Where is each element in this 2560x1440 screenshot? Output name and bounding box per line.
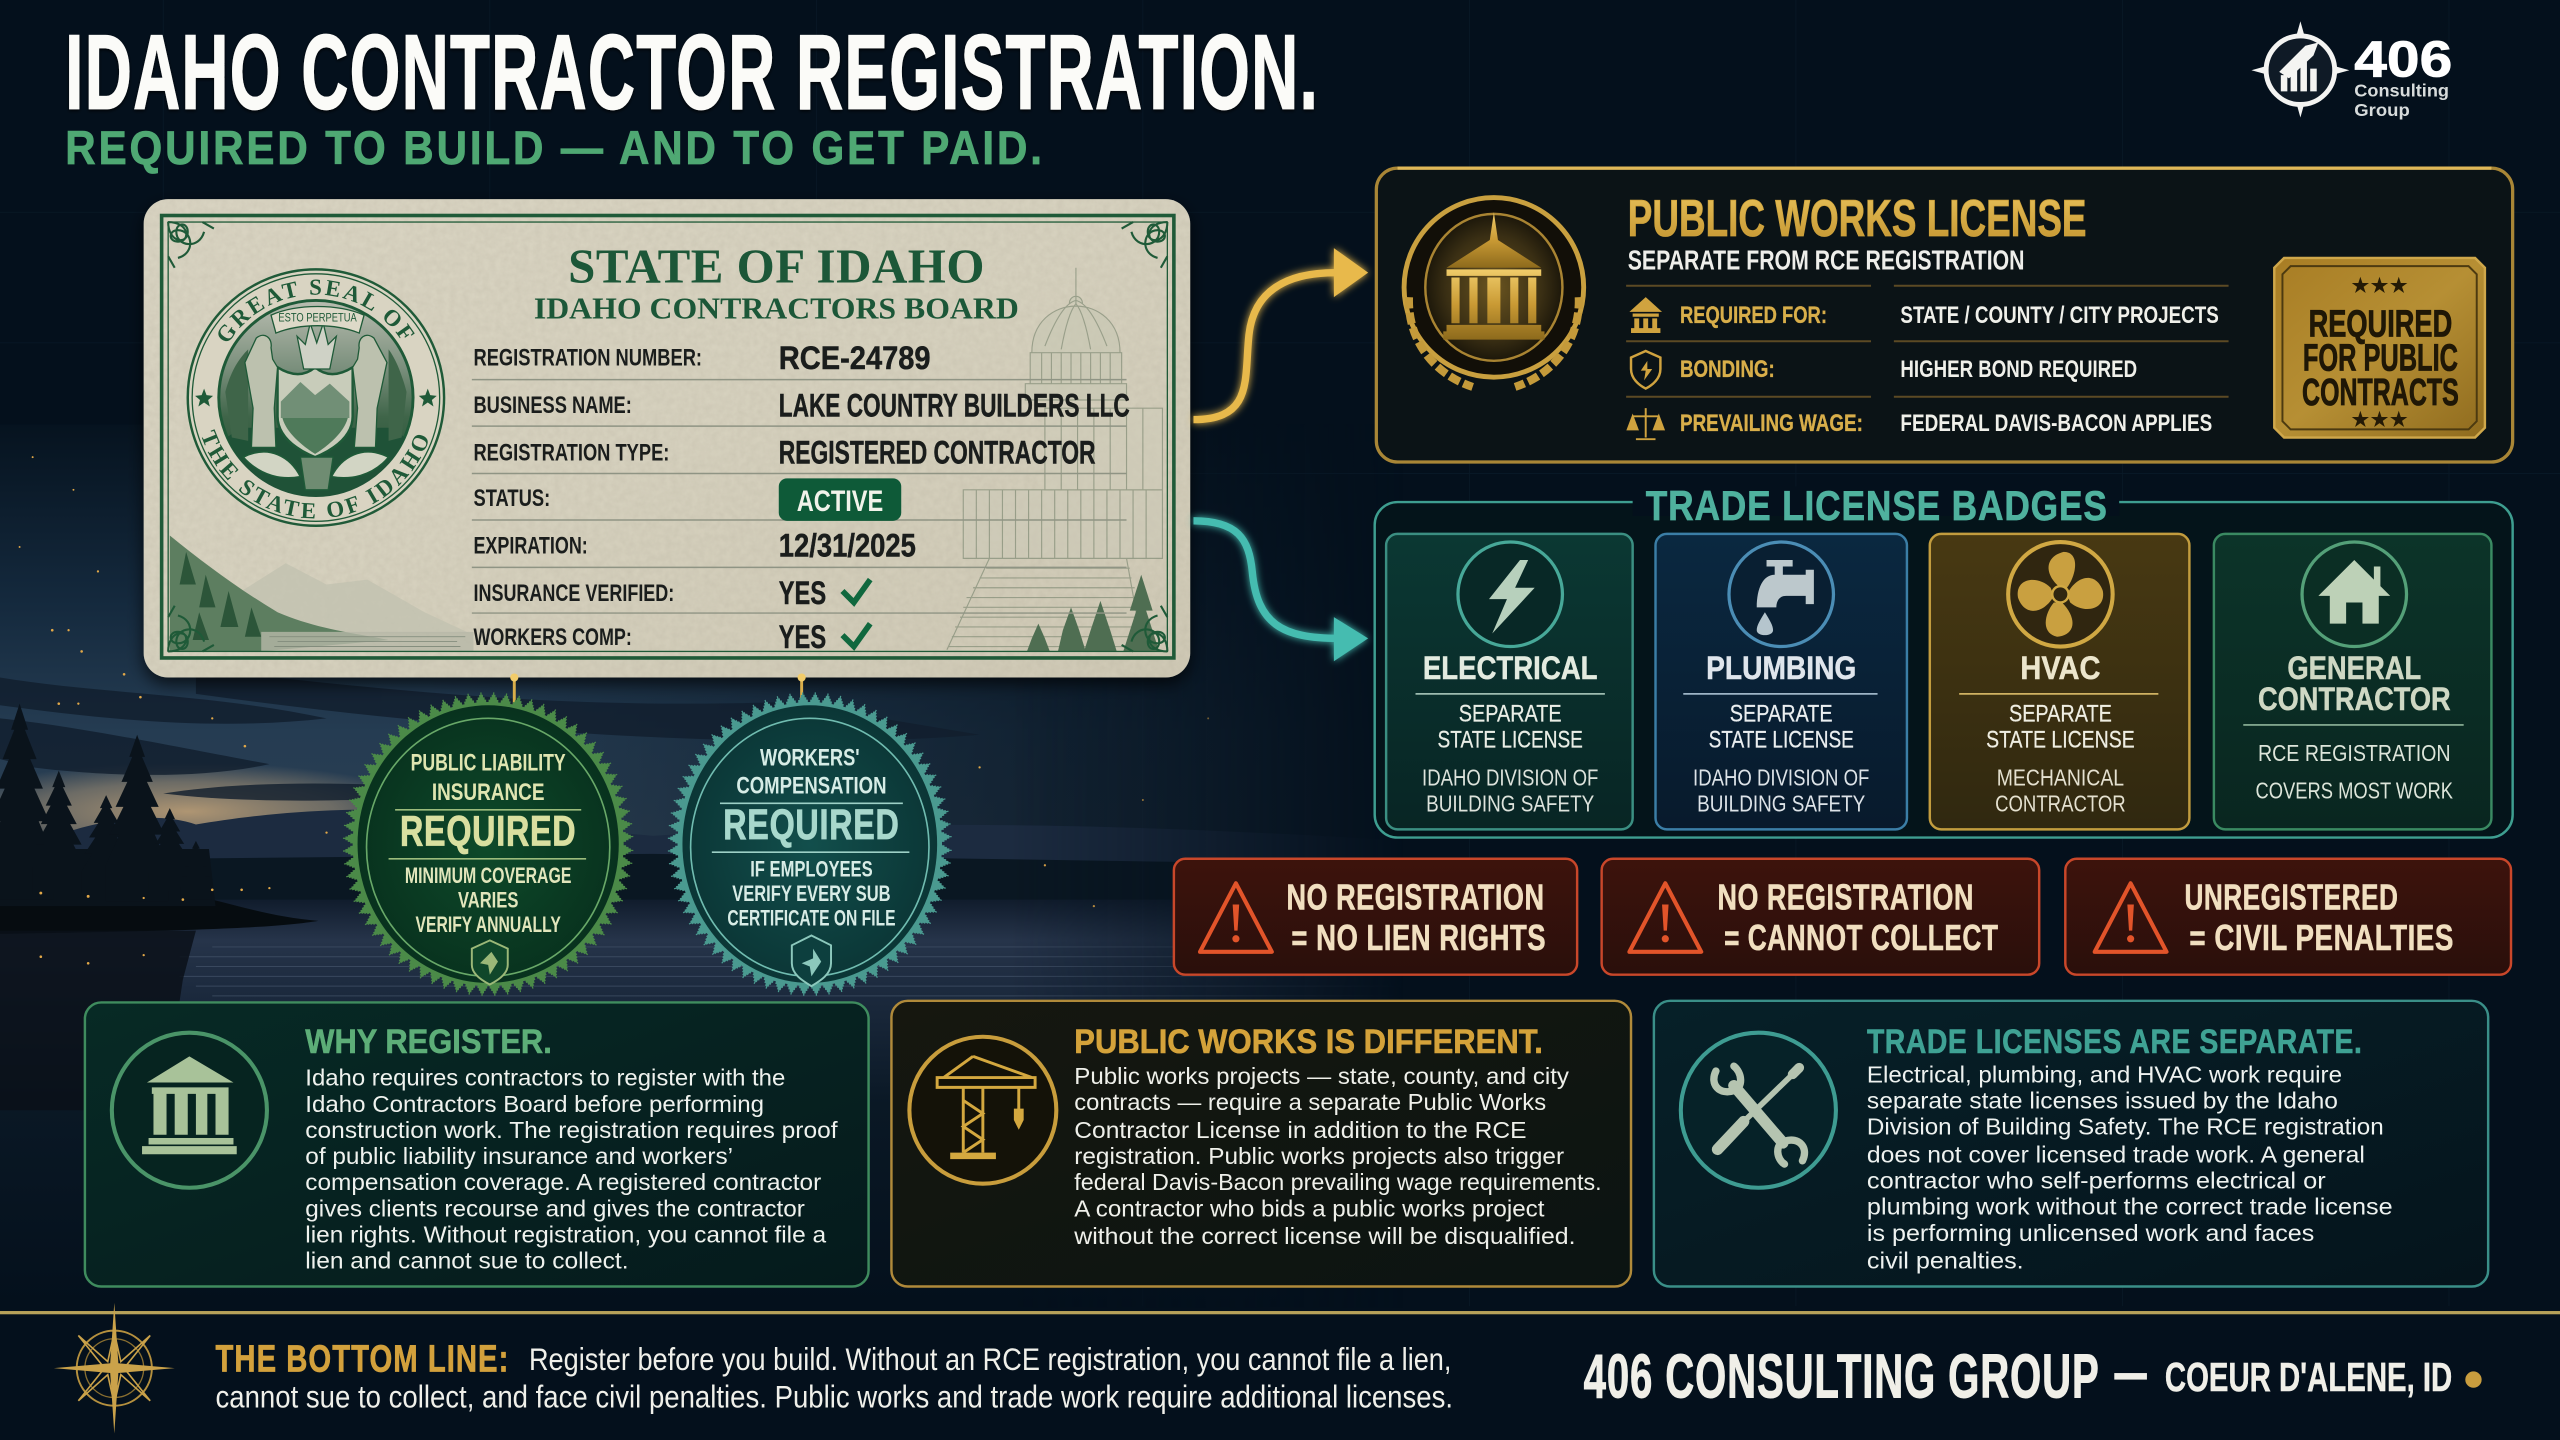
card: hvac: MECHANICAL [1997, 764, 2124, 790]
public works heading [1628, 190, 2087, 275]
card: plumbing: PLUMBING [1706, 649, 1856, 686]
logo: 406 Consulting Group: Group [2354, 100, 2410, 120]
logo: 406 Consulting Group: 406 [2354, 31, 2452, 88]
why register body text: gives clients recourse and gives the contractor [305, 1195, 805, 1221]
card: electrical: BUILDING SAFETY [1426, 790, 1594, 816]
logo: 406 Consulting Group [2251, 21, 2452, 120]
warning: no lien rights: NO REGISTRATION [1287, 876, 1544, 917]
icon: check marks [842, 580, 870, 647]
card: electrical [1386, 534, 1633, 829]
warning: cannot collect [1602, 859, 2039, 975]
warning: cannot collect: NO REGISTRATION [1718, 876, 1974, 917]
card heading [534, 238, 1019, 325]
seal: workers compensation: COMPENSATION [736, 773, 887, 799]
card field rows: INSURANCE VERIFIED: [473, 581, 674, 607]
public works body text: Public works projects — state, county, and city [1074, 1063, 1570, 1089]
arrow: teal to trade badges [1193, 521, 1368, 661]
seal: public liability insurance: PUBLIC LIABILITY [411, 751, 566, 777]
footer: bottom line bar [0, 1303, 2560, 1440]
card: general contractor: GENERAL [2287, 649, 2421, 686]
card field rows: RCE-24789 [779, 339, 931, 376]
card: hvac: STATE LICENSE [1986, 727, 2135, 754]
why register body text: of public liability insurance and workers’ [305, 1143, 733, 1169]
subtitle: REQUIRED TO BUILD — AND TO GET PAID. [65, 122, 1045, 175]
why register body text [305, 1065, 838, 1274]
icon: compass rose [54, 1303, 175, 1433]
arrow: gold to public works [1193, 248, 1368, 420]
card: hvac [1930, 534, 2189, 829]
seal: great seal of the state of Idaho: ESTO PERPETUA [278, 311, 357, 325]
trade licenses body text: Electrical, plumbing, and HVAC work require [1867, 1061, 2342, 1087]
panel: trade license badges [1375, 482, 2513, 838]
card: general contractor: RCE REGISTRATION [2258, 740, 2451, 766]
trade licenses body text [1867, 1061, 2393, 1274]
why register body text: compensation coverage. A registered contractor [305, 1169, 822, 1195]
panel: why register [85, 1002, 869, 1287]
seal: public liability insurance: VERIFY ANNUALLY [416, 912, 561, 937]
card field rows: BUSINESS NAME: [473, 393, 632, 419]
panel: public works is different [891, 1001, 1631, 1287]
why register body text: lien rights. Without registration, you cannot file a [305, 1221, 826, 1247]
logo: 406 Consulting Group: Consulting [2354, 80, 2449, 100]
seal: public liability insurance: REQUIRED [400, 808, 576, 855]
card: hvac: CONTRACTOR [1995, 790, 2126, 816]
card: electrical: ELECTRICAL [1423, 649, 1598, 686]
public works rows: HIGHER BOND REQUIRED [1900, 356, 2137, 383]
card field rows: REGISTERED CONTRACTOR [779, 434, 1096, 471]
public works body text: registration. Public works projects also trigger [1074, 1143, 1564, 1169]
warning: civil penalties [2065, 859, 2511, 975]
panel: trade licenses are separate [1654, 1001, 2488, 1287]
seal: workers compensation: CERTIFICATE ON FILE [727, 906, 896, 931]
icon: crane circle [909, 1037, 1056, 1184]
icon: crossed tools circle [1681, 1033, 1836, 1188]
card engraving: mountains and lake [170, 536, 473, 651]
trade licenses body text: civil penalties. [1867, 1248, 2024, 1274]
card heading: IDAHO CONTRACTORS BOARD [534, 290, 1019, 325]
public works rows: STATE / COUNTY / CITY PROJECTS [1900, 302, 2219, 329]
icon: warning triangle [1200, 883, 1272, 952]
card field rows: REGISTRATION TYPE: [473, 440, 669, 466]
icon: warning triangle [1629, 883, 1701, 952]
warning: civil penalties: = CIVIL PENALTIES [2189, 917, 2454, 958]
panel: trade licenses are separate: TRADE LICENSES ARE SEPARATE. [1867, 1023, 2362, 1061]
card border [162, 216, 1174, 658]
card: plumbing: SEPARATE [1730, 701, 1833, 728]
icon: shield [472, 940, 508, 984]
card: general contractor: COVERS MOST WORK [2256, 777, 2453, 803]
bottom line text: Register before you build. Without an RCE registration, you cannot file a lien, [529, 1342, 1451, 1377]
card: plumbing: BUILDING SAFETY [1697, 790, 1865, 816]
badge: required for public contracts: CONTRACTS [2302, 371, 2459, 413]
public works body text: A contractor who bids a public works project [1074, 1195, 1545, 1221]
status pill: active [779, 478, 901, 521]
card field rows [472, 339, 1130, 655]
panel: public works license [1376, 168, 2513, 462]
public works heading: SEPARATE FROM RCE REGISTRATION [1628, 244, 2024, 275]
card field rows: REGISTRATION NUMBER: [473, 346, 702, 372]
public works body text [1073, 1063, 1602, 1249]
public works rows: PREVAILING WAGE: [1680, 410, 1863, 437]
card: plumbing: IDAHO DIVISION OF [1693, 764, 1869, 790]
icon: fan [2008, 542, 2113, 647]
card field rows: EXPIRATION: [473, 533, 588, 559]
icon: warning triangle [2095, 883, 2167, 952]
trade badges heading: TRADE LICENSE BADGES [1646, 482, 2108, 529]
icon: small scales [1628, 408, 1664, 439]
trade licenses body text: contractor who self-performs electrical or [1867, 1168, 2326, 1194]
seal: workers compensation: WORKERS' [760, 746, 860, 772]
card: general contractor [2214, 534, 2491, 829]
badge: required for public contracts [2274, 258, 2485, 438]
seal: workers compensation: REQUIRED [723, 801, 900, 848]
card field rows: YES [779, 618, 826, 655]
public works rows: REQUIRED FOR: [1680, 302, 1827, 329]
panel: public works is different: PUBLIC WORKS IS DIFFERENT. [1074, 1023, 1543, 1061]
icon: gold courthouse medal [1404, 198, 1584, 387]
background: night lake scene [0, 424, 1404, 1308]
card engraving: capitol building [947, 268, 1162, 650]
icon: courthouse circle [112, 1033, 267, 1188]
bottom line text [216, 1337, 1453, 1414]
warning: cannot collect: = CANNOT COLLECT [1724, 917, 1998, 958]
card: electrical: STATE LICENSE [1438, 727, 1583, 754]
card: plumbing: STATE LICENSE [1709, 727, 1854, 754]
icon: small courthouse [1629, 297, 1662, 333]
trade licenses body text: is performing unlicensed work and faces [1867, 1220, 2314, 1246]
card corner ornaments [168, 222, 1167, 651]
card: electrical: SEPARATE [1459, 701, 1562, 728]
public works rows: FEDERAL DAVIS-BACON APPLIES [1900, 410, 2212, 437]
card: hvac: HVAC [2020, 649, 2100, 686]
seal: public liability insurance: INSURANCE [432, 780, 544, 806]
trade licenses body text: separate state licenses issued by the Idaho [1867, 1088, 2338, 1114]
badge: required for public contracts: FOR PUBLIC [2303, 337, 2458, 379]
badge: required for public contracts: REQUIRED [2309, 302, 2452, 344]
warning: no lien rights: = NO LIEN RIGHTS [1291, 917, 1546, 958]
icon: small shield [1631, 351, 1660, 389]
public works body text: without the correct license will be disqualified. [1073, 1223, 1576, 1249]
card field rows: WORKERS COMP: [473, 625, 632, 651]
badge: required for public contracts: ★★★ [2352, 409, 2409, 431]
badge: required for public contracts: ★★★ [2352, 275, 2409, 297]
card field rows: LAKE COUNTRY BUILDERS LLC [779, 386, 1130, 423]
public works heading: PUBLIC WORKS LICENSE [1628, 190, 2087, 248]
card: electrical: IDAHO DIVISION OF [1422, 764, 1598, 790]
card: plumbing [1656, 534, 1907, 829]
panel: registration card [136, 199, 1194, 692]
trade licenses body text: does not cover licensed trade work. A general [1867, 1141, 2365, 1167]
seal: public liability insurance: VARIES [458, 888, 518, 913]
card engraving: fir trees [1027, 575, 1159, 651]
trade licenses body text: plumbing work without the correct trade license [1867, 1194, 2393, 1220]
card: hvac: SEPARATE [2009, 701, 2112, 728]
seal: public liability insurance [344, 673, 632, 994]
card field rows: 12/31/2025 [779, 527, 916, 564]
card field rows: YES [779, 574, 826, 611]
panel: why register: WHY REGISTER. [305, 1023, 552, 1061]
icon: house [2302, 542, 2407, 647]
icon: lightning bolt [1458, 542, 1562, 647]
why register body text: lien and cannot sue to collect. [305, 1248, 629, 1274]
public works body text: contracts — require a separate Public Works [1074, 1089, 1546, 1115]
seal: great seal of the state of Idaho: THE STATE OF IDAHO [202, 429, 428, 518]
title: IDAHO CONTRACTOR REGISTRATION. [65, 14, 1319, 132]
why register body text: Idaho Contractors Board before performing [305, 1091, 764, 1117]
card: general contractor: CONTRACTOR [2258, 680, 2451, 717]
icon: shield [792, 936, 831, 986]
seal: public liability insurance: MINIMUM COVERAGE [405, 863, 571, 888]
brand signature: COEUR D'ALENE, ID [2165, 1354, 2452, 1400]
seal: workers compensation: IF EMPLOYEES [750, 857, 873, 882]
bottom line text: THE BOTTOM LINE: [216, 1337, 509, 1379]
public works rows: BONDING: [1680, 356, 1775, 383]
seal: great seal of the state of Idaho [186, 268, 446, 527]
brand signature: 406 CONSULTING GROUP [1584, 1343, 2100, 1412]
card heading: STATE OF IDAHO [568, 238, 984, 293]
seal: workers compensation: VERIFY EVERY SUB [732, 881, 891, 906]
why register body text: Idaho requires contractors to register with the [305, 1065, 785, 1091]
public works rows [1626, 286, 2229, 439]
seal: great seal of the state of Idaho: GREAT SEAL OF [218, 280, 415, 342]
warning: civil penalties: UNREGISTERED [2184, 876, 2398, 917]
icon: faucet [1729, 542, 1833, 647]
public works body text: Contractor License in addition to the RCE [1074, 1117, 1527, 1143]
why register body text: construction work. The registration requires proof [305, 1117, 838, 1143]
public works body text: federal Davis-Bacon prevailing wage requirements. [1074, 1169, 1602, 1195]
status pill: active: ACTIVE [797, 485, 883, 518]
card field rows: STATUS: [473, 486, 550, 512]
warning: no lien rights [1174, 859, 1577, 975]
trade licenses body text: Division of Building Safety. The RCE registration [1867, 1114, 2384, 1140]
seal: workers compensation [669, 673, 950, 994]
bottom line text: cannot sue to collect, and face civil penalties. Public works and trade work require additional licenses. [216, 1379, 1453, 1414]
